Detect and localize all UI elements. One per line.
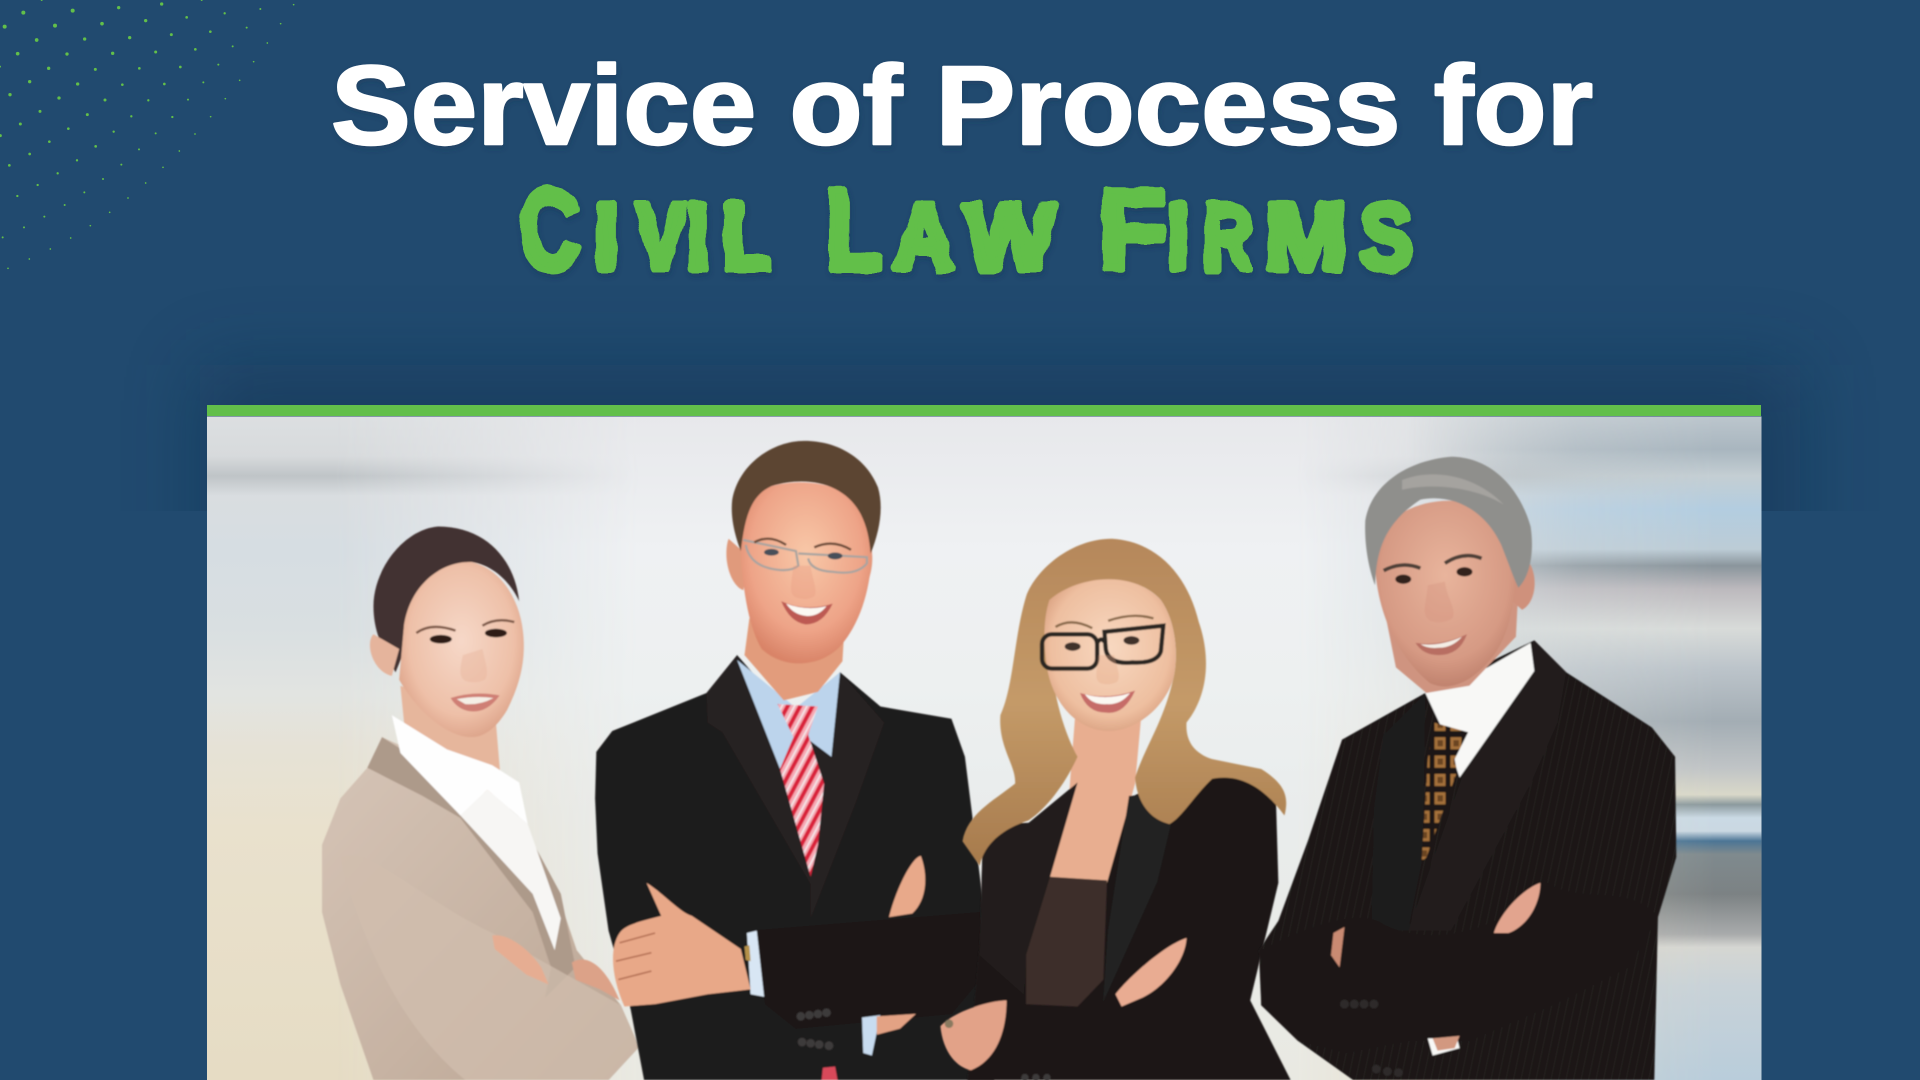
subtitle: Civil Law Firms: I: [594, 184, 618, 289]
person: man in glasses and black suit: [595, 441, 994, 1080]
subtitle: Civil Law Firms: I: [1166, 184, 1190, 289]
title: Service of Process for: Service of Process for: [331, 43, 1593, 168]
person: grey-haired man in pinstripe suit: [1259, 457, 1676, 1080]
subtitle: Civil Law Firms: A: [894, 184, 954, 289]
person: woman in beige jacket: [322, 527, 639, 1080]
subtitle: Civil Law Firms: I: [686, 184, 710, 289]
panel: team photo: [207, 416, 1762, 1080]
green accent bar: [207, 405, 1761, 416]
subtitle: Civil Law Firms: L: [722, 184, 770, 289]
subtitle: Civil Law Firms: R: [1203, 184, 1253, 289]
subtitle: Civil Law Firms: W: [965, 184, 1055, 289]
soft shadow behind photo: [206, 370, 1794, 511]
subtitle: Civil Law Firms: V: [636, 184, 686, 289]
subtitle: Civil Law Firms: F: [1099, 167, 1165, 294]
subtitle: Civil Law Firms: C: [520, 167, 580, 294]
dot pattern: halftone corner: [0, 0, 294, 269]
subtitle: Civil Law Firms: L: [826, 167, 884, 294]
person: blonde woman with glasses: [940, 539, 1291, 1080]
subtitle: Civil Law Firms: S: [1360, 184, 1413, 289]
subtitle: Civil Law Firms: M: [1265, 184, 1347, 289]
photo background: blurred streaks: [207, 416, 1762, 1080]
